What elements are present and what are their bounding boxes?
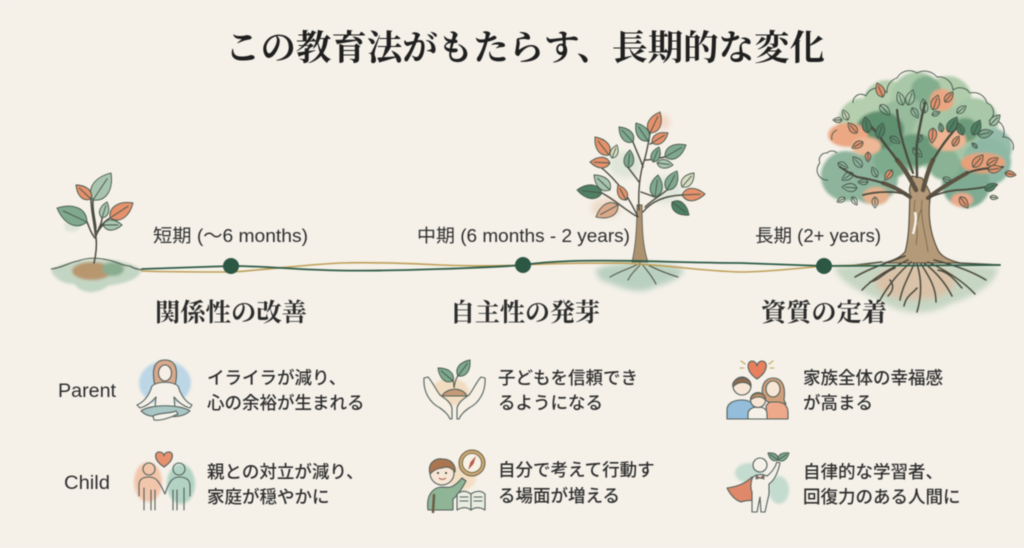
text: parent medium term: るようになる: [498, 393, 603, 413]
title: この教育法がもたらす、長期的な変化: [225, 29, 825, 68]
text: child short term: 親との対立が減り、: [207, 462, 364, 482]
text: child medium term: 自分で考えて行動す: [498, 460, 655, 480]
panel: short term: [134, 226, 364, 510]
text: child short term: 家庭が穏やかに: [207, 487, 330, 507]
milestone dot: medium term: [515, 257, 531, 273]
icon: child with compass and book: [428, 450, 485, 512]
row label: Parent: Parent: [58, 381, 117, 402]
illustration: seedling: [51, 168, 142, 292]
text: parent long term: が高まる: [803, 393, 873, 413]
text: child long term: 回復力のある人間に: [803, 487, 960, 507]
text: child medium term: る場面が増える: [498, 486, 620, 506]
text: parent medium term: 子どもを信頼でき: [498, 368, 638, 388]
milestone dot: long term: [816, 258, 832, 274]
panel: long term: [727, 226, 960, 512]
icon: meditating parent: [137, 360, 192, 420]
heading: lasting qualities: 資質の定着: [761, 299, 887, 327]
icon: hands holding sprout: [424, 357, 485, 419]
panel: medium term: [417, 226, 655, 512]
period label: short term: 短期 (〜6 months): [153, 226, 308, 246]
icon: parent and child holding hands: [134, 452, 195, 510]
illustration: young tree: [576, 109, 705, 291]
illustration: mature tree: [817, 71, 1017, 313]
heading: relationship improvement: 関係性の改善: [155, 298, 307, 327]
milestone dot: short term: [223, 258, 239, 274]
text: parent long term: 家族全体の幸福感: [803, 368, 943, 388]
heading: emerging autonomy: 自主性の発芽: [450, 298, 600, 327]
text: parent short term: 心の余裕が生まれる: [207, 393, 364, 413]
icon: happy family with heart: [727, 361, 788, 419]
period label: medium term: 中期 (6 months - 2 years): [417, 226, 630, 246]
period label: long term: 長期 (2+ years): [755, 226, 881, 246]
timeline: two intertwined growth lines: [142, 261, 1000, 272]
text: child long term: 自律的な学習者、: [803, 462, 943, 482]
row label: Child: Child: [64, 473, 110, 494]
text: parent short term: イライラが減り、: [207, 368, 346, 388]
icon: child superhero with sprout: [727, 450, 791, 512]
